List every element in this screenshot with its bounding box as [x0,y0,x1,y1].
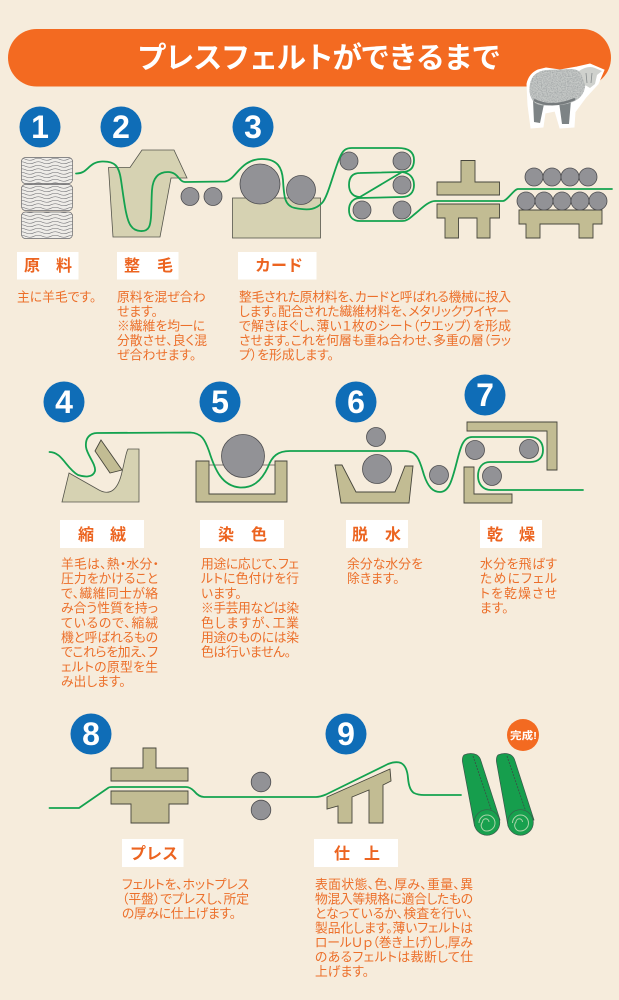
label: press [122,839,184,867]
text: drying: 水分を飛ばす [480,556,557,572]
text: blending: 分散させ、良く混 [117,333,207,348]
text: card: プ）を形成します。 [239,348,334,362]
step 1 badge: 1 [31,109,49,145]
felt line step 4-7 [50,432,583,492]
text: dewatering [347,556,423,586]
text: blending [117,290,207,362]
step 4 badge: 4 [55,384,73,420]
text: dyeing: 色は行いません。 [201,645,291,660]
dewatering machine [335,428,448,503]
text: finishing: 物混入等規格に適合したもの [315,892,473,906]
step 9 badge [326,714,366,754]
text: dyeing: います。 [201,586,242,601]
text: finishing: 表面状態、色、厚み、重量、異 [315,877,473,892]
text: finishing: 製品化します。薄いフェルトは [315,920,473,936]
label: press: プレス [130,845,178,863]
step 3 badge [232,106,274,148]
text: felting: で、繊維同士が絡 [61,586,158,601]
blending machine [108,150,187,237]
step 6 badge: 6 [347,384,365,420]
label: dewatering [346,520,408,548]
text: felting: 圧力をかけること [61,571,158,586]
icon: sheep [527,64,604,128]
dryer [464,422,557,503]
step 7 badge: 7 [476,377,494,413]
text: card: 整毛された原材料を、カードと呼ばれる機械に投入 [239,290,511,304]
press step 8 [111,748,271,823]
step 4 badge [44,382,84,422]
label: finishing [314,839,398,867]
finishing table [327,769,391,823]
text: felting: 羊毛は、熱・水分・ [61,556,159,572]
felt line step 1-3 [76,148,612,231]
step 1 badge [20,106,60,148]
text: finishing: 上げます。 [315,964,369,979]
text: felting: 機と呼ばれるもの [61,630,158,645]
text: felting: ているので、縮絨 [61,615,158,630]
label: dyeing [200,520,284,548]
text: card: で解きほぐし、薄い１枚のシート（ウエップ）を形成 [239,318,511,334]
label: felting: 縮絨 [78,525,126,544]
label: drying [480,520,542,548]
step 3 badge: 3 [244,109,262,145]
text: drying [480,556,557,616]
step 2 badge: 2 [112,109,130,145]
step 5 badge: 5 [211,384,229,420]
text: felting [61,556,159,689]
text: dyeing: ※手芸用などは染 [201,601,299,616]
text: finishing: となっているか、検査を行い、 [315,906,473,921]
carding rollers [340,152,411,219]
step 7 badge [464,374,506,416]
text: card: させます。これを何層も重ね合わせ、多重の層（ラッ [239,333,511,348]
step 5 badge [200,382,240,422]
text: blending: せます。 [117,304,158,319]
dyeing machine [196,434,287,502]
felting machine [62,440,139,502]
wool bales [22,158,72,238]
text: finishing: のあるフェルトは裁断して仕 [315,950,473,964]
text: dyeing: 用途のものには染 [201,630,299,645]
text: drying: トを乾燥させ [480,586,557,601]
label: dewatering: 脱水 [352,526,401,544]
text: dewatering: 除きます。 [347,571,399,586]
blending rollers [181,188,222,206]
label: raw material [17,252,78,280]
label: felting [60,520,144,548]
badge: completed: 完成! [510,729,537,742]
step 2 badge [100,106,142,148]
step 6 badge [336,382,376,422]
step 8 badge: 8 [82,716,100,752]
step 9 badge: 9 [337,716,355,752]
text: felting: ェルトの原型を生 [61,659,158,674]
text: dyeing: 色しますが、工業 [201,615,299,630]
text: press: （平盤）でプレスし、所定 [122,892,249,906]
text: felting: み合う性質を持っ [61,601,158,616]
label: dyeing: 染色 [218,525,267,544]
label: raw material: 原料 [24,257,72,275]
step 8 badge [70,714,112,754]
text: drying: ためにフェル [480,571,557,586]
badge: completed [507,719,539,751]
roller press [517,168,607,238]
text: press: フェルトを、ホットプレス [122,877,249,892]
text: card: します。配合された繊維材料を、メタリックワイヤー [239,304,509,319]
text: blending: ぜ合わせます。 [117,348,196,362]
text: raw material: 主に羊毛です。 [17,290,96,304]
title: プレスフェルトができるまで [137,41,501,75]
label: finishing: 仕上 [334,845,380,863]
label: drying: 乾燥 [487,525,535,544]
text: felting: み出します。 [61,674,126,689]
press machine step 3 [437,160,500,238]
label: blending [117,252,178,280]
text: finishing: ロールＵｐ（巻き上げ）し,厚み [315,935,473,950]
text: dyeing [200,556,299,660]
text: dewatering: 余分な水分を [347,556,423,572]
text: press [122,877,249,921]
text: blending: ※繊維を均一に [117,318,205,334]
text: finishing [315,877,473,979]
text: dyeing: 用途に応じて、フェ [201,556,299,572]
text: card [239,290,511,362]
label: card: カード [255,257,303,275]
finished felt rolls [462,754,534,835]
text: blending: 原料を混ぜ合わ [117,290,206,304]
text: dyeing: ルトに色付けを行 [200,571,299,586]
text: felting: でこれらを加え、フ [61,645,158,660]
label: card [238,252,316,280]
text: drying: ます。 [480,601,508,616]
text: press: の厚みに仕上げます。 [122,906,236,921]
felt line step 8-9 [50,762,461,808]
carding machine [232,164,320,238]
title banner [8,29,611,86]
label: blending: 整毛 [124,257,173,275]
